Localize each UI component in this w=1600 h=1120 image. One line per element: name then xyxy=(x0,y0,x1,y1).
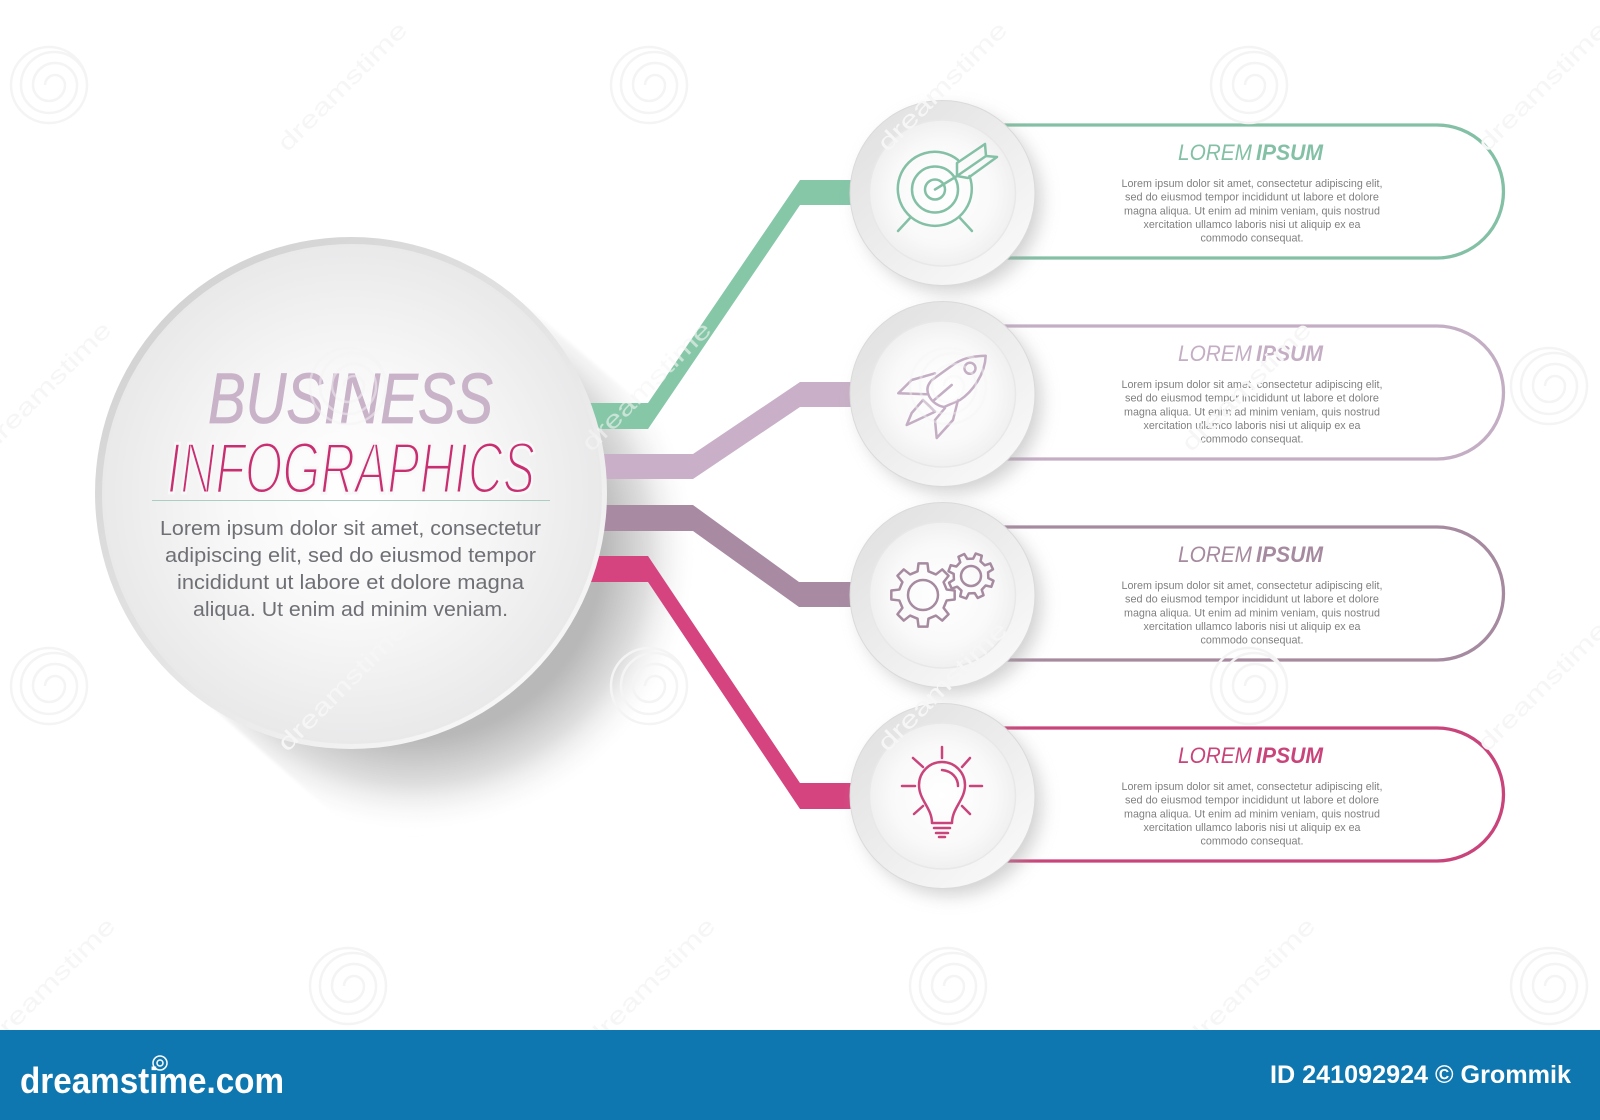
icon: target xyxy=(898,144,997,231)
pill title: LOREM xyxy=(1178,743,1253,768)
disc xyxy=(850,302,1041,493)
pill title xyxy=(1178,542,1324,567)
pill body text: magna aliqua. Ut enim ad minim veniam, quis nostrud xyxy=(1124,205,1380,217)
pill body text: Lorem ipsum dolor sit amet, consectetur adipiscing elit, xyxy=(1122,781,1382,793)
pill body text: sed do eiusmod tempor incididunt ut labore et dolore xyxy=(1125,192,1379,204)
main description: incididunt ut labore et dolore magna xyxy=(177,571,525,594)
watermark text: dreamstime xyxy=(272,16,413,157)
logo spiral xyxy=(153,1056,167,1070)
watermark text: dreamstime xyxy=(1472,16,1600,157)
watermark text: dreamstime xyxy=(580,912,721,1053)
pill body text: xercitation ullamco laboris nisi ut aliquip ex ea xyxy=(1144,219,1361,231)
watermark text: dreamstime xyxy=(872,616,1013,757)
pill body text: xercitation ullamco laboris nisi ut aliquip ex ea xyxy=(1144,420,1361,432)
footer bar xyxy=(0,1030,1600,1120)
pill title: LOREM xyxy=(1178,542,1253,567)
item 2: launch xyxy=(850,302,1504,493)
pill body text: sed do eiusmod tempor incididunt ut labore et dolore xyxy=(1125,392,1379,404)
disc xyxy=(850,100,1041,292)
main description: Lorem ipsum dolor sit amet, consectetur xyxy=(160,517,541,540)
footer credit: ID 241092924 © Grommik xyxy=(1270,1061,1571,1089)
heading line: infographics: INFOGRAPHICS xyxy=(167,429,535,509)
pill outline xyxy=(950,326,1504,459)
connector: dark mauve xyxy=(590,505,860,607)
pill body text: commodo consequat. xyxy=(1200,635,1304,647)
pill body text: magna aliqua. Ut enim ad minim veniam, quis nostrud xyxy=(1124,808,1380,820)
pill body text: sed do eiusmod tempor incididunt ut labore et dolore xyxy=(1125,794,1379,806)
main heading xyxy=(167,360,535,509)
pill body text: xercitation ullamco laboris nisi ut aliquip ex ea xyxy=(1144,822,1361,834)
item 4: idea xyxy=(850,704,1504,895)
pill title xyxy=(1178,140,1324,165)
pill body text: Lorem ipsum dolor sit amet, consectetur adipiscing elit, xyxy=(1122,379,1382,391)
pill body text xyxy=(1122,580,1382,647)
watermark text: dreamstime xyxy=(576,316,717,457)
connector: green xyxy=(590,180,860,429)
pill body text xyxy=(1122,781,1382,848)
item 3: settings xyxy=(850,502,1504,694)
pill outline xyxy=(950,527,1504,660)
main description: adipiscing elit, sed do eiusmod tempor xyxy=(165,544,536,567)
pill body text: sed do eiusmod tempor incididunt ut labore et dolore xyxy=(1125,594,1379,606)
disc xyxy=(850,704,1041,895)
pill body text: commodo consequat. xyxy=(1200,233,1304,245)
pill body text: xercitation ullamco laboris nisi ut aliquip ex ea xyxy=(1144,621,1361,633)
heading underline xyxy=(152,500,550,501)
pill body text xyxy=(1122,379,1382,446)
pill title: IPSUM xyxy=(1256,140,1324,165)
pill title xyxy=(1178,341,1324,366)
pill outline xyxy=(950,125,1503,258)
pill body text: commodo consequat. xyxy=(1200,836,1304,848)
pill title: IPSUM xyxy=(1256,341,1324,366)
pill title: IPSUM xyxy=(1256,743,1324,768)
pill outline xyxy=(950,728,1504,861)
connector: pink xyxy=(590,556,860,809)
long shadow of main circle xyxy=(170,300,800,890)
watermark text: dreamstime xyxy=(1180,912,1321,1053)
disc xyxy=(850,502,1041,694)
watermark text: dreamstime xyxy=(1176,316,1317,457)
icon: rocket xyxy=(898,356,986,438)
pill body text: commodo consequat. xyxy=(1200,434,1304,446)
pill title: LOREM xyxy=(1178,140,1253,165)
connector: light mauve xyxy=(590,382,860,479)
pill body text: magna aliqua. Ut enim ad minim veniam, quis nostrud xyxy=(1124,607,1380,619)
icon: light bulb xyxy=(902,747,982,837)
watermark text: dreamstime xyxy=(872,16,1013,157)
main circle xyxy=(95,237,607,749)
watermark text: dreamstime xyxy=(1472,616,1600,757)
pill body text: Lorem ipsum dolor sit amet, consectetur adipiscing elit, xyxy=(1122,178,1382,190)
footer logo: dreamstime.com xyxy=(20,1060,284,1101)
heading line: business: BUSINESS xyxy=(208,360,493,439)
pill body text: Lorem ipsum dolor sit amet, consectetur adipiscing elit, xyxy=(1122,580,1382,592)
pill body text: magna aliqua. Ut enim ad minim veniam, quis nostrud xyxy=(1124,406,1380,418)
pill title xyxy=(1178,743,1324,768)
main description xyxy=(160,517,541,621)
item 1: goal xyxy=(850,100,1503,292)
icon: gears xyxy=(891,547,1000,627)
main description: aliqua. Ut enim ad minim veniam. xyxy=(193,598,508,621)
pill body text xyxy=(1122,178,1382,245)
watermark text: dreamstime xyxy=(272,616,413,757)
pill title: LOREM xyxy=(1178,341,1253,366)
pill title: IPSUM xyxy=(1256,542,1324,567)
